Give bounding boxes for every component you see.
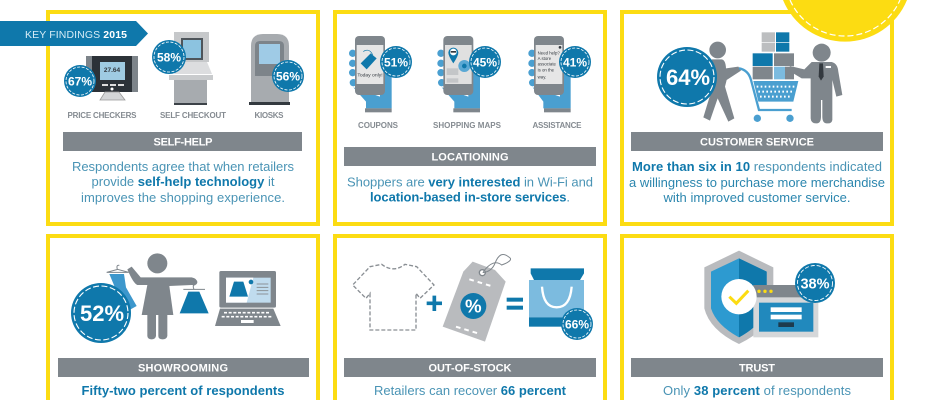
label: shopping maps: SHOPPING MAPS (433, 121, 502, 130)
text: out-of-stock description: Retailers can recover 66 percent (374, 383, 567, 398)
icon: phone with shopping map (437, 36, 480, 112)
icon: self checkout (169, 32, 213, 105)
text: customer service description (629, 159, 885, 205)
heading bar: trust: TRUST (739, 362, 775, 374)
panel: out-of-stock (335, 236, 605, 400)
text: trust description: Only 38 percent of respondents (663, 383, 852, 398)
text: self-help description (72, 159, 294, 205)
heading bar: self-help: SELF-HELP (154, 136, 212, 148)
icon: phone with assistance message (528, 36, 571, 112)
badge: 56%: 56% (276, 70, 300, 84)
badge: 45%: 45% (473, 56, 497, 70)
text: customer service description: with improved customer service. (662, 190, 850, 205)
text: locationing description: Shoppers are very interested in Wi-Fi and (347, 174, 593, 190)
panel: customer service (622, 12, 892, 224)
badge: 38%: 38% (800, 276, 830, 292)
label: kiosks: KIOSKS (254, 111, 284, 120)
badge: 64% (657, 47, 717, 107)
label: coupons: COUPONS (358, 121, 399, 130)
icon: phone with assistance message: associate (538, 62, 557, 67)
ribbon: key findings 2015 (0, 21, 148, 46)
badge: 67%: 67% (68, 74, 92, 88)
sun badge (783, 0, 907, 42)
icon: price checker (86, 56, 138, 100)
badge: 66%: 66% (565, 318, 589, 332)
badge: 45% (469, 46, 501, 78)
icon: phone with assistance message: A store (538, 56, 552, 61)
illustration: security shield and login window (704, 251, 818, 344)
icon: phone with assistance message: is on the (538, 67, 555, 72)
text: self-help description: Respondents agree that when retailers (72, 159, 294, 174)
label: price checkers: PRICE CHECKERS (68, 111, 137, 120)
badge: 67% (64, 65, 96, 97)
panel: self-help (48, 12, 318, 224)
text: customer service description: a willingness to purchase more merchandise (629, 175, 885, 190)
icon: phone with coupon: Today only! (357, 73, 383, 79)
heading bar: showrooming: SHOWROOMING (138, 362, 228, 374)
text: showrooming description: Fifty-two percent of respondents (82, 383, 284, 398)
badge: 51% (380, 46, 412, 78)
text: locationing description: location-based in-store services. (370, 190, 570, 204)
heading bar: showrooming (58, 358, 309, 377)
heading bar: customer service: CUSTOMER SERVICE (700, 136, 814, 148)
ribbon: key findings 2015: KEY FINDINGS 2015 (25, 29, 127, 41)
badge: 41% (559, 46, 591, 78)
icon: phone with coupon (349, 36, 392, 112)
illustration: woman comparing clothes with laptop (107, 253, 281, 339)
heading bar: customer service (631, 132, 883, 151)
panel: locationing (335, 12, 605, 224)
text: self-help description: improves the shopping experience. (81, 190, 285, 205)
illustration: shirt plus discount equals bag (353, 254, 584, 342)
illustration: shopper, cart and associate (703, 32, 842, 123)
icon: kiosk (249, 34, 290, 105)
text: self-help description: provide self-help technology it (92, 174, 275, 189)
badge: 56% (272, 60, 304, 92)
heading bar: locationing: LOCATIONING (432, 152, 508, 164)
badge: 41%: 41% (563, 56, 587, 70)
text: customer service description: More than six in 10 respondents indicated (632, 159, 882, 174)
badge: 58%: 58% (157, 50, 181, 64)
icon: phone with assistance message: way. (538, 74, 546, 79)
icon: price checker: 27.64 (104, 67, 121, 74)
illustration: shirt plus discount equals bag: % (465, 295, 482, 316)
badge: 52% (71, 283, 131, 343)
label: self checkout: SELF CHECKOUT (160, 111, 226, 120)
badge: 64%: 64% (666, 65, 710, 90)
badge: 58% (152, 40, 186, 74)
icon: phone with assistance message: Need help? (538, 50, 560, 55)
heading bar: out-of-stock: OUT-OF-STOCK (428, 362, 512, 374)
heading bar: locationing (344, 147, 596, 166)
text: locationing description (347, 174, 593, 204)
badge: 38% (795, 263, 835, 303)
badge: 51%: 51% (384, 56, 408, 70)
badge: 52%: 52% (80, 301, 124, 326)
label: assistance: ASSISTANCE (532, 121, 582, 130)
badge: 66% (561, 308, 593, 340)
sun badge dashed ring (790, 0, 900, 36)
heading bar: self-help (63, 132, 302, 151)
panel: showrooming (48, 236, 318, 400)
panel: trust (622, 236, 892, 400)
heading bar: trust (631, 358, 883, 377)
heading bar: out-of-stock (344, 358, 596, 377)
